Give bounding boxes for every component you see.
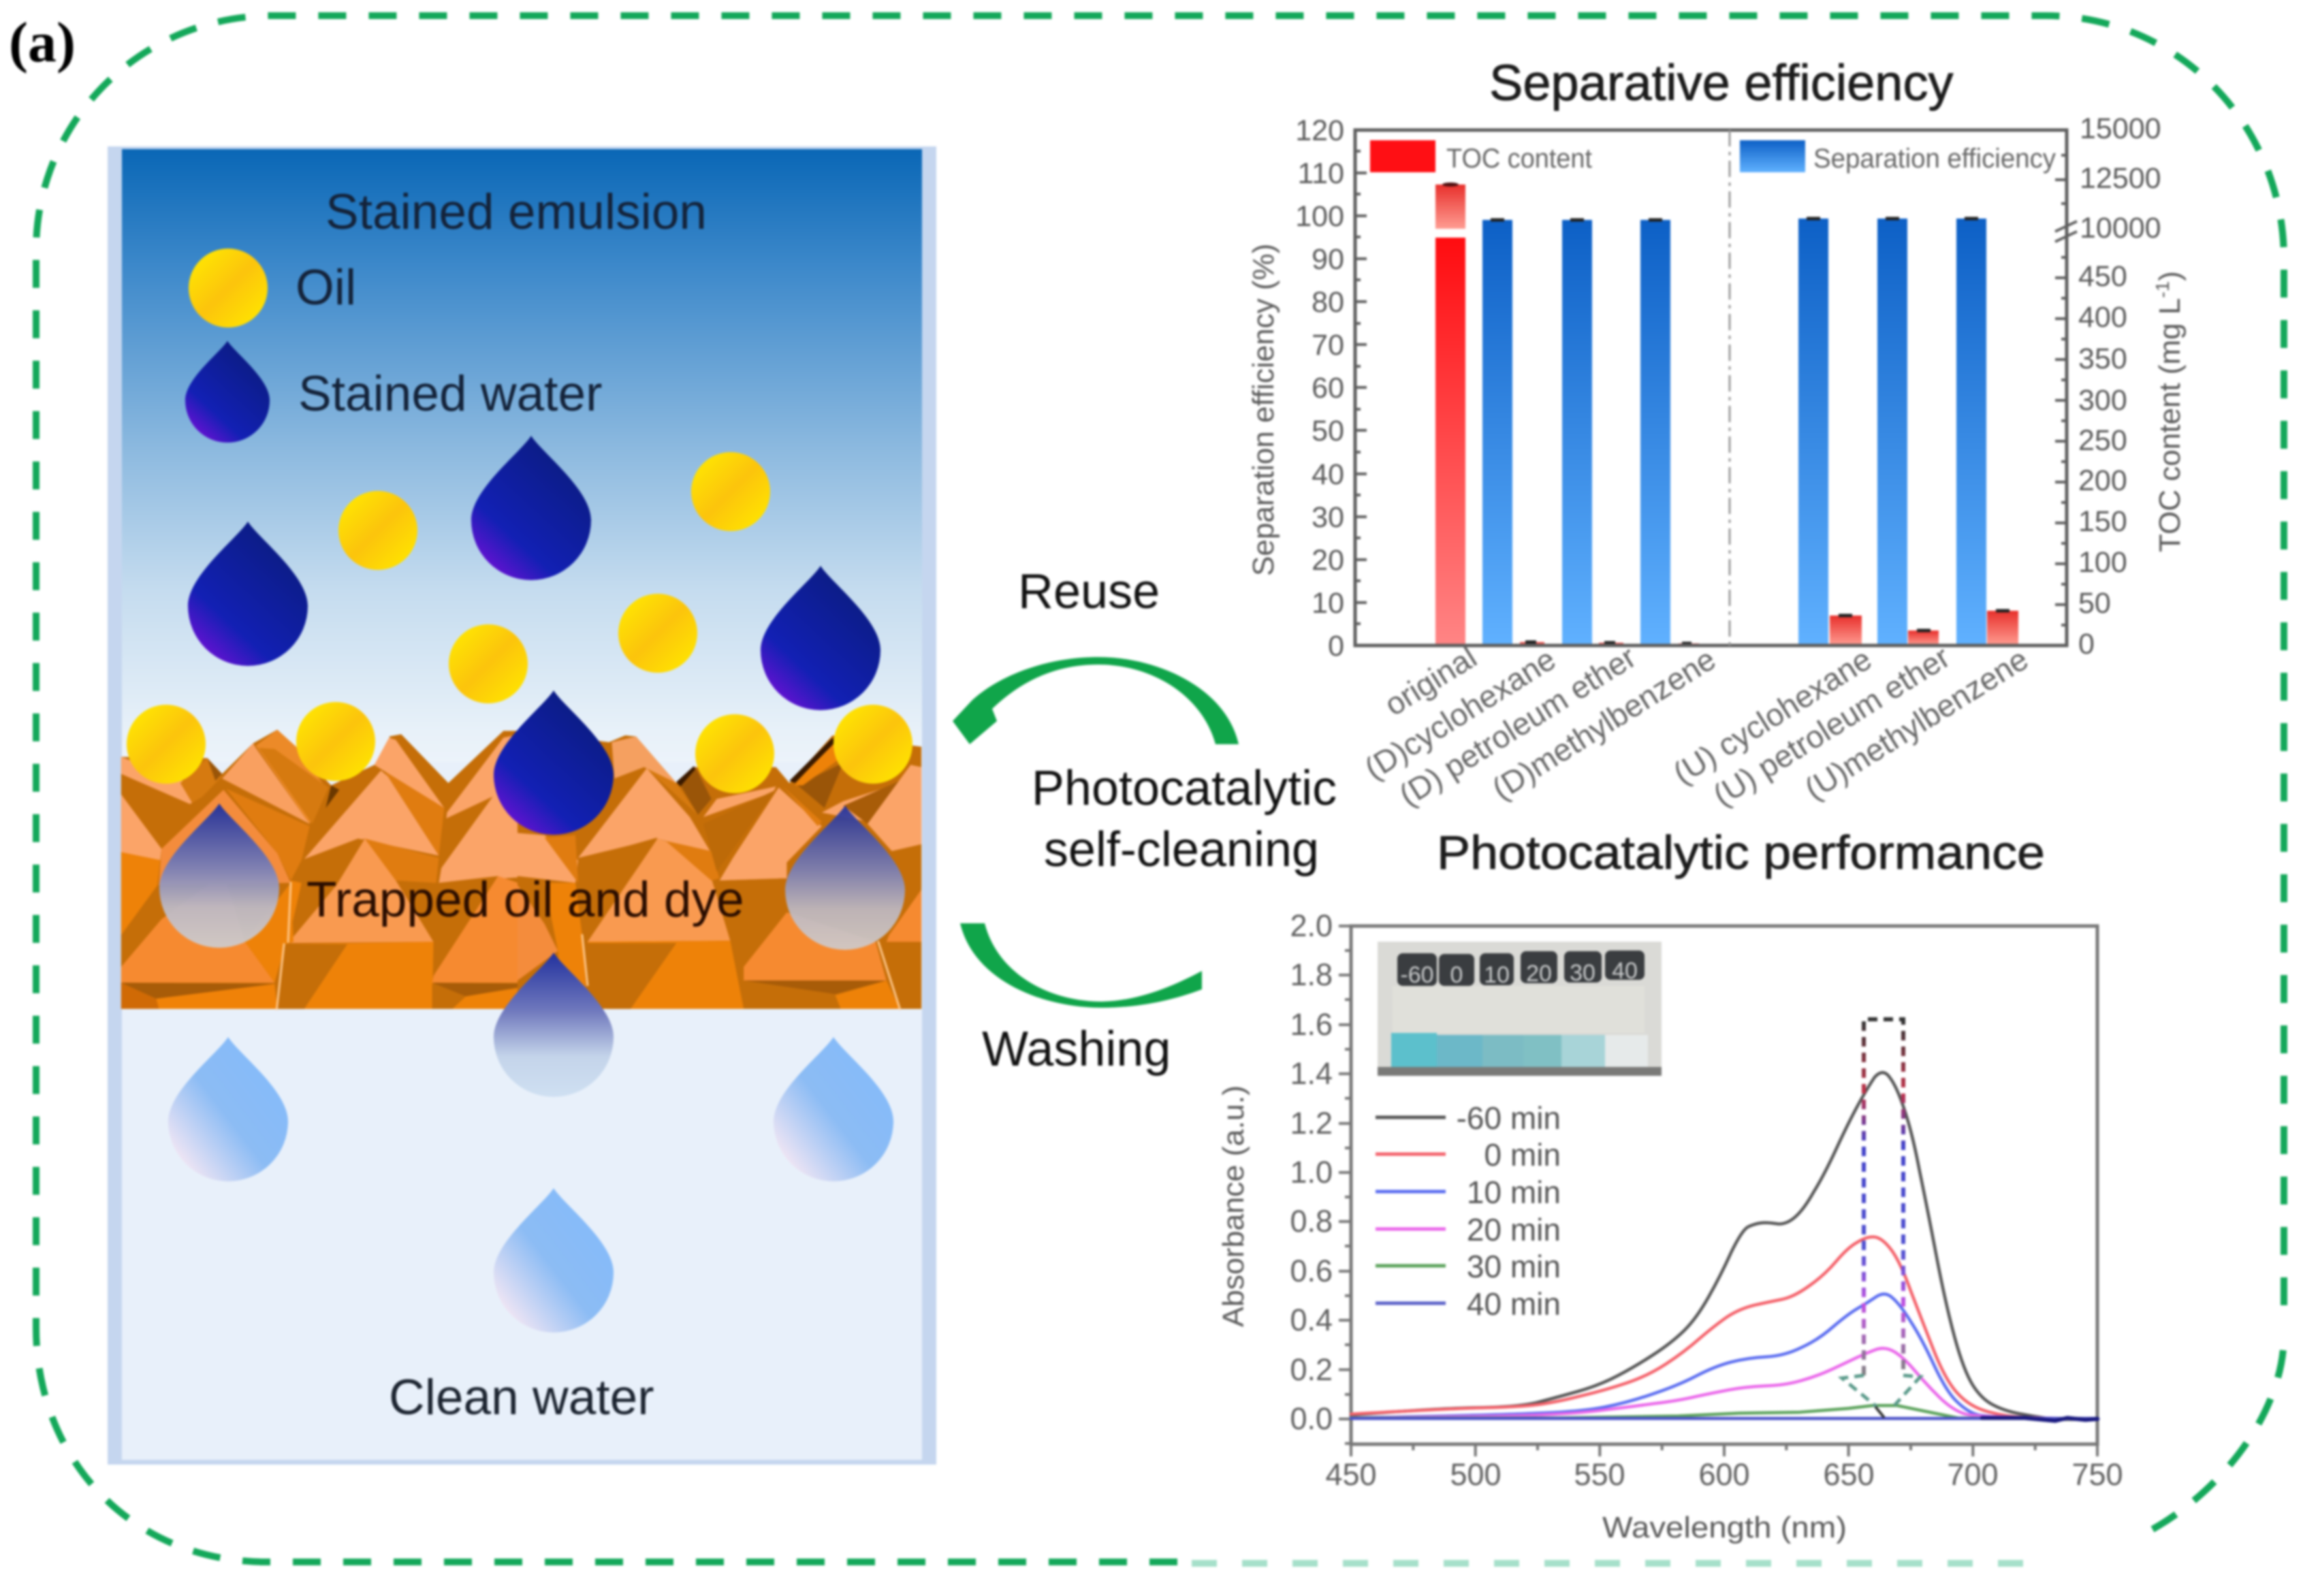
right axis labels: 450 — [2078, 260, 2127, 293]
left axis labels: 70 — [1312, 329, 1344, 362]
category labels: (D)cyclohexane — [1359, 641, 1561, 786]
right axis labels: 150 — [2078, 505, 2127, 538]
left axis labels: 110 — [1297, 157, 1344, 190]
left axis labels: 20 — [1312, 544, 1344, 577]
inset photo: vials: 30 — [1570, 960, 1595, 986]
legend label: stained water: Stained water — [298, 366, 602, 421]
heading: stained emulsion: Stained emulsion — [325, 185, 707, 240]
right axis labels: 200 — [2078, 464, 2127, 497]
plot frame and ticks — [1339, 926, 2097, 1456]
icons: stained water drops — [185, 341, 880, 835]
x axis title: Wavelength (nm) — [1602, 1511, 1847, 1544]
dashed highlight box — [1842, 1019, 1920, 1418]
inset photo: vials: 0 — [1450, 962, 1463, 988]
left axis labels: 50 — [1312, 415, 1344, 447]
arrow: reuse curve — [953, 657, 1239, 744]
icons: oil droplets — [127, 249, 912, 793]
legend: time series — [1376, 1100, 1561, 1322]
x axis labels: 750 — [2071, 1457, 2123, 1492]
legend: time series: 20 min — [1467, 1212, 1561, 1247]
left axis labels: 90 — [1312, 243, 1344, 276]
right axis labels: 400 — [2078, 301, 2127, 334]
category labels — [1359, 639, 2034, 813]
chart title: Photocatalytic performance — [1437, 826, 2045, 879]
legend: TOC content — [1370, 140, 1592, 174]
label: reuse: Reuse — [1018, 564, 1160, 619]
y axis labels: 1.4 — [1290, 1056, 1333, 1091]
x axis labels: 600 — [1698, 1457, 1750, 1492]
y axis labels: 1.2 — [1290, 1106, 1333, 1140]
spectra curves — [1351, 1072, 2097, 1421]
icons: clean water drops — [168, 1037, 893, 1332]
right axis labels: 250 — [2078, 424, 2127, 457]
category labels: (D)methylbenzene — [1486, 641, 1721, 807]
icons: water drops fading inside the membrane — [159, 803, 905, 1097]
y axis labels — [1290, 908, 1333, 1436]
x axis labels: 500 — [1450, 1457, 1502, 1492]
right axis labels: 300 — [2078, 384, 2127, 417]
label: clean water: Clean water — [389, 1370, 654, 1425]
left axis labels: 60 — [1312, 372, 1344, 404]
y axis labels: 0.2 — [1290, 1352, 1333, 1387]
legend: time series: -60 min — [1457, 1100, 1561, 1136]
y axis labels: 0.0 — [1290, 1401, 1333, 1436]
left axis labels: 100 — [1295, 200, 1344, 233]
x axis labels: 700 — [1947, 1457, 1999, 1492]
right axis labels: 10000 — [2080, 212, 2161, 244]
category labels: (U) petroleum ether — [1707, 639, 1956, 813]
left axis labels: 0 — [1328, 630, 1344, 663]
arrow: washing curve — [960, 923, 1202, 1008]
y axis labels: 0.6 — [1290, 1254, 1333, 1288]
right axis title: ) — [2153, 271, 2187, 281]
label: washing: Washing — [982, 1022, 1171, 1076]
category labels: (D) petroleum ether — [1393, 639, 1642, 813]
y axis labels: 1.6 — [1290, 1007, 1333, 1042]
label: trapped oil and dye: Trapped oil and dye — [306, 872, 744, 927]
right axis labels: 350 — [2078, 342, 2127, 375]
right axis labels: 12500 — [2080, 162, 2161, 195]
chart: photocatalytic performance absorbance spectra — [1217, 826, 2123, 1544]
inset photo: vials: 10 — [1484, 962, 1510, 988]
panel label (a): (a) — [9, 11, 76, 74]
y axis labels: 0.4 — [1290, 1303, 1333, 1337]
membrane: pyramid layer, left half — [121, 730, 538, 1009]
bars: TOC content after separation — [1520, 611, 2018, 645]
right axis title: -1 — [2152, 281, 2173, 298]
plot frame and ticks — [1355, 130, 2077, 645]
left axis labels — [1295, 114, 1344, 663]
x axis labels: 550 — [1574, 1457, 1625, 1492]
legend: TOC content: TOC content — [1446, 144, 1592, 174]
category labels: (U) cyclohexane — [1667, 641, 1877, 791]
chart title: Separative efficiency — [1489, 54, 1953, 111]
right axis labels: 50 — [2078, 587, 2111, 620]
label: photocatalytic self-cleaning: Photocatalytic — [1032, 761, 1337, 816]
bars: separation efficiency — [1482, 219, 1986, 645]
category labels: original — [1378, 639, 1482, 722]
x axis labels: 650 — [1823, 1457, 1875, 1492]
x axis labels: 450 — [1325, 1457, 1377, 1492]
y axis labels: 1.0 — [1290, 1155, 1333, 1190]
left axis labels: 40 — [1312, 458, 1344, 491]
inset photo: vials: 20 — [1526, 961, 1552, 987]
panel: membrane separation schematic — [108, 146, 936, 1465]
left axis title: Separation efficiency (%) — [1247, 244, 1280, 576]
inset photo: vials: -60 — [1400, 962, 1434, 988]
x axis labels — [1325, 1457, 2123, 1492]
inset photo: vials — [1378, 942, 1662, 1076]
legend: time series: 10 min — [1467, 1175, 1561, 1210]
legend: separation efficiency: Separation efficiency — [1813, 144, 2056, 174]
inset photo: vials: 40 — [1612, 958, 1638, 984]
left axis labels: 80 — [1312, 286, 1344, 319]
bars: TOC content original — [1435, 182, 1465, 645]
legend: time series: 0 min — [1484, 1137, 1561, 1172]
left axis labels: 10 — [1312, 587, 1344, 620]
membrane: pyramid layer, right half — [518, 731, 921, 1009]
right axis labels — [2078, 112, 2161, 660]
chart: separative efficiency bar chart — [1247, 54, 2187, 813]
legend: separation efficiency — [1740, 140, 2056, 174]
right axis title: TOC content (mg L — [2153, 298, 2187, 552]
right axis labels: 15000 — [2080, 112, 2161, 145]
y axis labels: 2.0 — [1290, 908, 1333, 943]
y axis labels: 1.8 — [1290, 957, 1333, 992]
left axis labels: 30 — [1312, 501, 1344, 534]
legend label: oil: Oil — [296, 260, 356, 315]
left axis labels: 120 — [1295, 114, 1344, 147]
right axis labels: 100 — [2078, 546, 2127, 579]
legend: time series: 40 min — [1467, 1286, 1561, 1322]
category labels: (U)methylbenzene — [1798, 641, 2034, 807]
label: photocatalytic self-cleaning: self-cleaning — [1044, 823, 1319, 877]
y axis labels: 0.8 — [1290, 1204, 1333, 1239]
y axis title: Absorbance (a.u.) — [1217, 1085, 1250, 1327]
right axis labels: 0 — [2078, 628, 2095, 660]
legend: time series: 30 min — [1467, 1249, 1561, 1284]
